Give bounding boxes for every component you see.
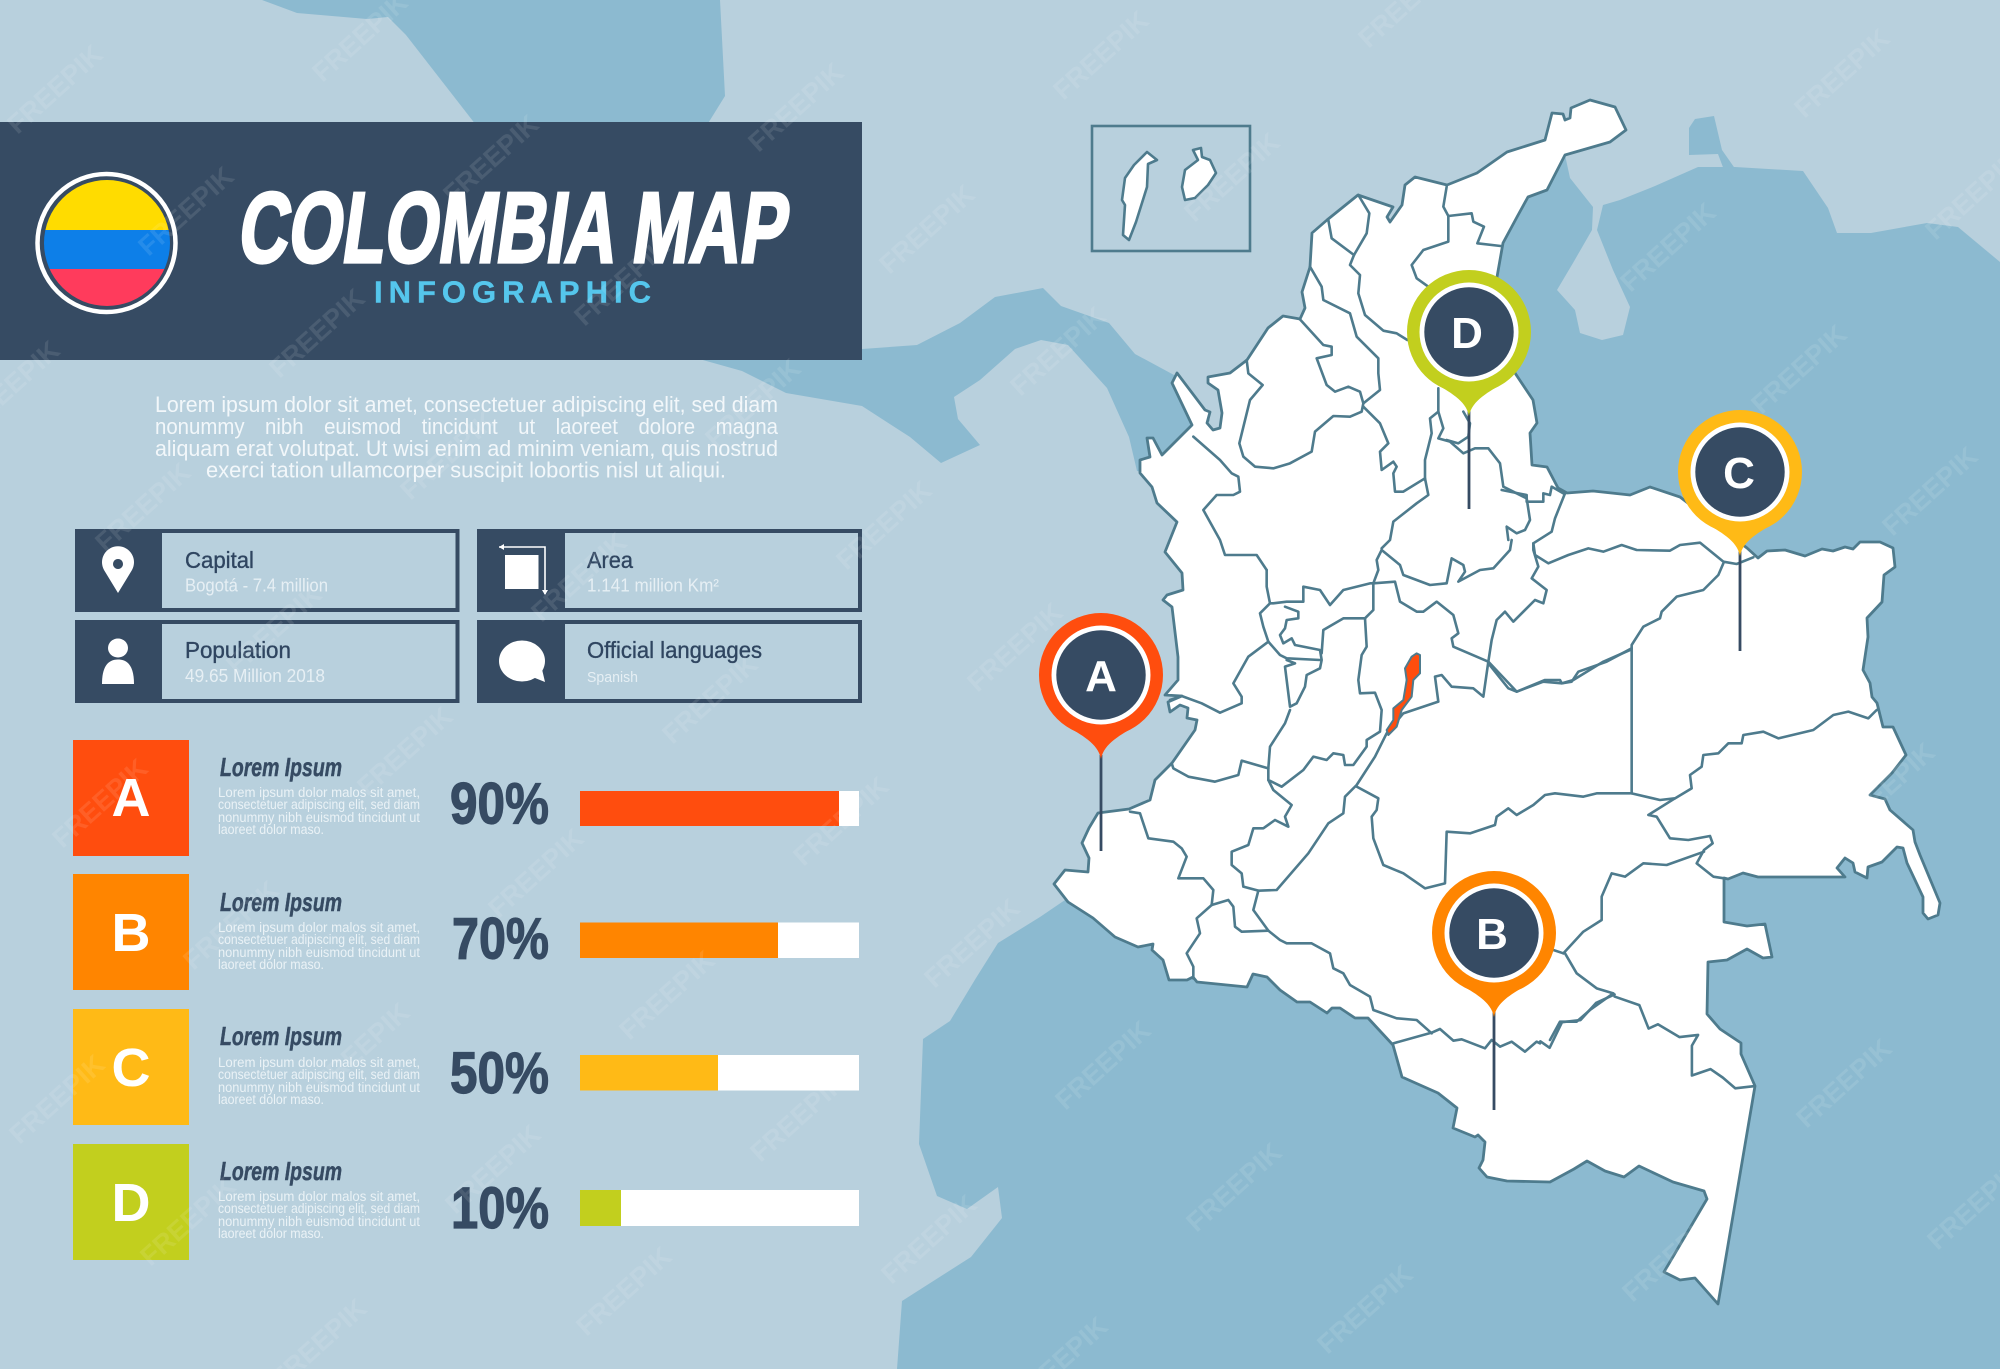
info box: Population — [75, 620, 458, 703]
watermarks: FREEPIK — [132, 161, 240, 262]
watermarks: FREEPIK — [744, 1067, 852, 1168]
intro paragraph: aliquam erat volutpat. Ut wisi enim ad minim veniam, quis nostrud — [155, 436, 778, 461]
department borders: Amazon — [1540, 994, 1754, 1088]
watermarks: FREEPIK — [308, 997, 416, 1098]
map pin C: C — [1723, 449, 1755, 498]
heading: COLOMBIA MAP: COLOMBIA MAP — [233, 172, 797, 284]
watermarks: FREEPIK — [1004, 301, 1112, 402]
row A — [73, 740, 859, 856]
row A: Lorem Ipsum — [220, 752, 342, 782]
intro paragraph — [155, 392, 779, 482]
watermarks: FREEPIK — [1311, 1259, 1419, 1360]
row A: A — [112, 768, 150, 828]
row B: Lorem Ipsum — [220, 887, 342, 917]
row A: laoreet dolor maso. — [218, 822, 324, 837]
info box: Official languages: Spanish — [587, 669, 638, 686]
row C: nonummy nibh euismod tincidunt ut — [218, 1080, 420, 1095]
row A: consectetuer adipiscing elit, sed diam — [218, 797, 420, 812]
info box: Official languages — [477, 620, 860, 703]
title banner — [0, 122, 862, 360]
watermarks: FREEPIK — [656, 649, 764, 750]
country outline — [1054, 100, 1940, 1304]
info box: Capital: Bogotá - 7.4 million — [185, 576, 328, 596]
watermarks: FREEPIK — [873, 179, 981, 280]
row C: Lorem Ipsum — [220, 1021, 342, 1051]
watermarks: FREEPIK — [1047, 5, 1155, 106]
row A: Lorem ipsum dolor malos sit amet, — [218, 785, 420, 800]
map pin B: B — [1476, 910, 1508, 959]
info box: Official languages: Official languages — [587, 637, 762, 663]
row C — [73, 1009, 859, 1125]
watermarks: FREEPIK — [875, 1189, 983, 1290]
watermarks: FREEPIK — [568, 231, 676, 332]
department borders: north — [1193, 187, 1530, 570]
watermarks: FREEPIK — [918, 893, 1026, 994]
row D — [73, 1144, 859, 1260]
row B: laoreet dolor maso. — [218, 957, 324, 972]
row B: Lorem ipsum dolor malos sit amet, — [218, 920, 420, 935]
watermarks: FREEPIK — [1745, 319, 1853, 420]
department borders: south — [1187, 905, 1540, 1052]
map pin C — [1678, 410, 1802, 651]
watermarks: FREEPIK — [570, 1241, 678, 1342]
row D: laoreet dolor maso. — [218, 1226, 324, 1241]
watermarks: FREEPIK — [1790, 1033, 1898, 1134]
row B — [73, 874, 859, 990]
intro paragraph: Lorem ipsum dolor sit amet, consectetuer adipiscing elit, sed diam — [155, 392, 778, 417]
watermarks: FREEPIK — [46, 753, 154, 854]
inset: San Andres islands — [1092, 126, 1250, 251]
watermarks: FREEPIK — [613, 945, 721, 1046]
watermarks: FREEPIK — [3, 1049, 111, 1150]
sea: northern gulf — [262, 0, 725, 125]
department borders: centre — [1130, 540, 1630, 1040]
info box: Population: 49.65 Million 2018 — [185, 666, 325, 686]
sea: main body — [897, 155, 2000, 1369]
row C: laoreet dolor maso. — [218, 1092, 324, 1107]
watermarks: FREEPIK — [220, 579, 328, 680]
watermarks: FREEPIK — [439, 1119, 547, 1220]
row B: nonummy nibh euismod tincidunt ut — [218, 945, 420, 960]
watermarks: FREEPIK — [482, 823, 590, 924]
icon: area square — [499, 544, 548, 595]
highlighted department: Bogota — [1387, 653, 1420, 735]
info box: Capital — [75, 529, 458, 612]
row D: Lorem Ipsum — [220, 1156, 342, 1186]
watermarks: FREEPIK — [1616, 1207, 1724, 1308]
watermarks: FREEPIK — [1833, 737, 1941, 838]
sea: small northern lake — [1689, 116, 1736, 170]
sea: Panama strait — [685, 288, 1210, 480]
watermarks: FREEPIK — [394, 405, 502, 506]
info box: Area: 1.141 million Km² — [587, 576, 719, 596]
watermarks: FREEPIK — [177, 875, 285, 976]
info box: Area — [477, 529, 860, 612]
row A: 90% — [450, 772, 549, 836]
watermarks: FREEPIK — [1, 39, 109, 140]
row D: Lorem ipsum dolor malos sit amet, — [218, 1189, 420, 1204]
watermarks: FREEPIK — [1178, 127, 1286, 228]
watermarks: FREEPIK — [89, 457, 197, 558]
row D: 10% — [451, 1176, 549, 1241]
row B: consectetuer adipiscing elit, sed diam — [218, 932, 420, 947]
icon: speech bubble — [499, 640, 545, 682]
row B: B — [112, 903, 150, 963]
watermarks: FREEPIK — [787, 771, 895, 872]
map pin D: D — [1451, 309, 1483, 358]
intro paragraph: nonummy nibh euismod tincidunt ut laoreet dolore magna — [155, 414, 779, 439]
map pin A: A — [1085, 652, 1117, 701]
watermarks: FREEPIK — [1788, 23, 1896, 124]
watermarks: FREEPIK — [742, 57, 850, 158]
intro paragraph: exerci tation ullamcorper suscipit lobortis nisl ut aliqui. — [206, 458, 726, 482]
row C: Lorem ipsum dolor malos sit amet, — [218, 1055, 420, 1070]
row D: D — [112, 1173, 150, 1233]
watermarks: FREEPIK — [1876, 441, 1984, 542]
watermarks: FREEPIK — [1049, 1015, 1157, 1116]
row B: 70% — [452, 906, 549, 972]
icon: location pin — [102, 546, 134, 593]
row C: consectetuer adipiscing elit, sed diam — [218, 1067, 420, 1082]
info box: Population: Population — [185, 637, 291, 663]
map of Colombia — [1054, 100, 1940, 1304]
map pin D — [1407, 270, 1531, 509]
row D: consectetuer adipiscing elit, sed diam — [218, 1201, 420, 1216]
row D: nonummy nibh euismod tincidunt ut — [218, 1214, 420, 1229]
info box: Capital: Capital — [185, 547, 254, 573]
map pin A — [1039, 613, 1163, 851]
watermarks: FREEPIK — [263, 283, 371, 384]
row A: nonummy nibh euismod tincidunt ut — [218, 810, 420, 825]
watermarks: FREEPIK — [525, 527, 633, 628]
watermarks: FREEPIK — [830, 475, 938, 576]
watermarks: FREEPIK — [699, 353, 807, 454]
watermarks: FREEPIK — [1180, 1137, 1288, 1238]
watermarks: FREEPIK — [961, 597, 1069, 698]
icon: person — [102, 638, 134, 684]
info box: Area: Area — [587, 547, 633, 573]
department borders: east — [1488, 487, 1877, 953]
watermarks: FREEPIK — [1614, 197, 1722, 298]
watermarks: FREEPIK — [351, 701, 459, 802]
row C: C — [112, 1038, 150, 1098]
map pin B — [1432, 871, 1556, 1110]
watermarks: FREEPIK — [134, 1171, 242, 1272]
icon: Colombia flag — [38, 174, 176, 312]
subheading: INFOGRAPHIC: INFOGRAPHIC — [374, 274, 651, 310]
row C: 50% — [450, 1041, 549, 1106]
watermarks: FREEPIK — [437, 109, 545, 210]
